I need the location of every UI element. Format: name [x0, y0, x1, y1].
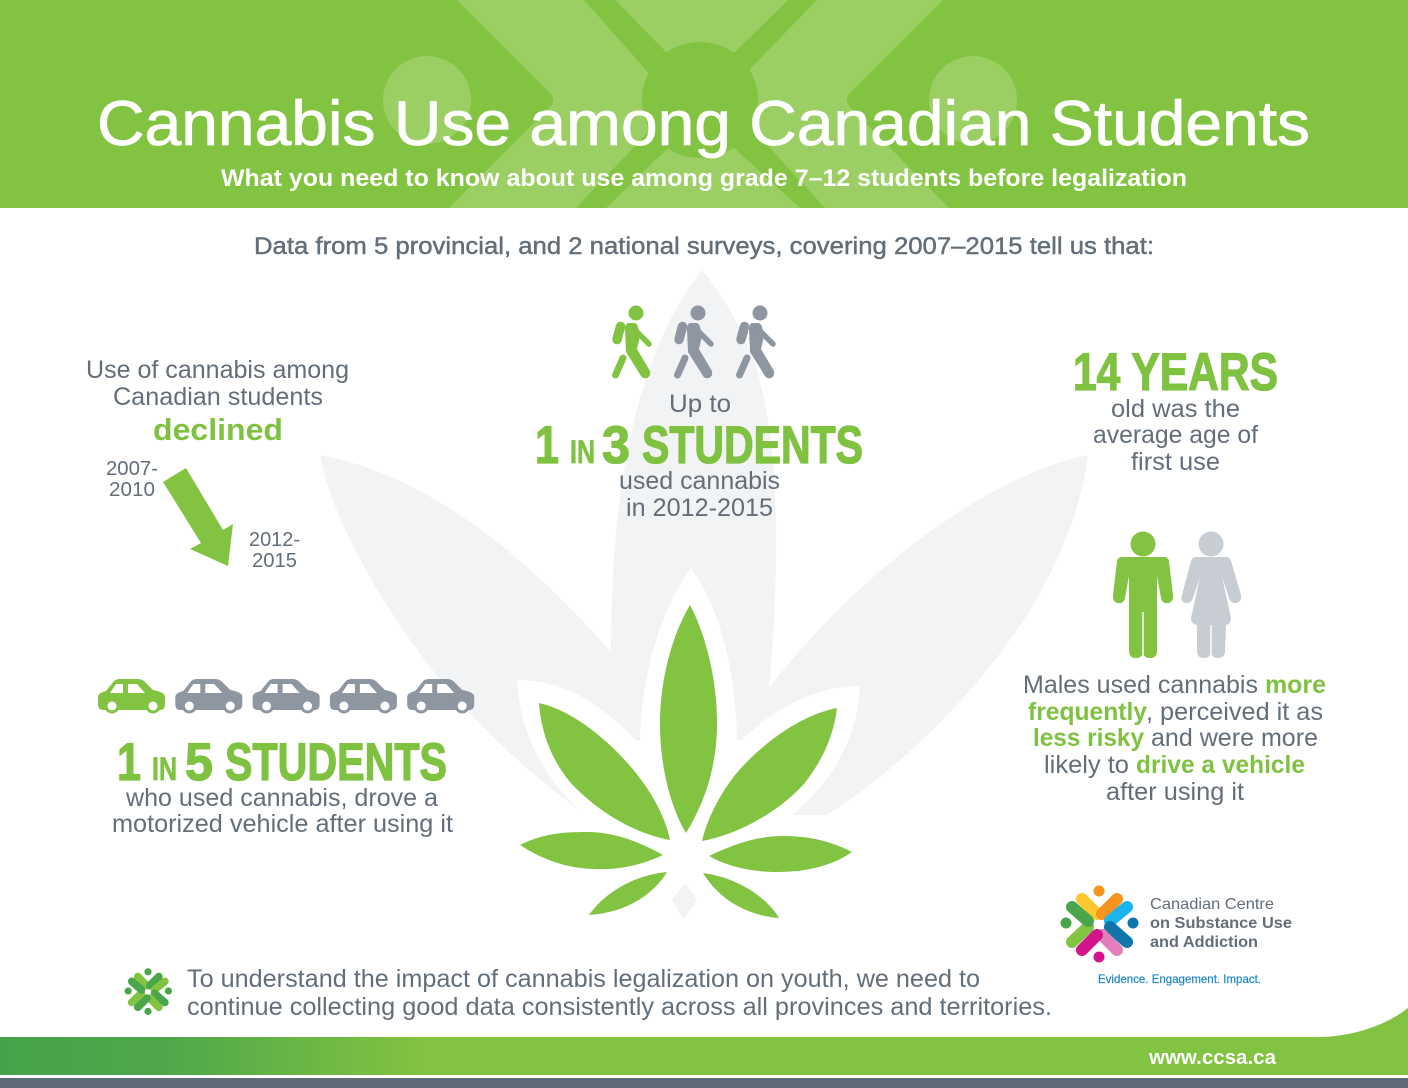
text: male findings: after using it [1106, 778, 1244, 806]
stat: 1 in 5 students: STUDENTS [225, 733, 447, 792]
text: age description [1093, 395, 1258, 476]
stat: 1 in 3 students: 1 [535, 416, 559, 475]
footer band [0, 1008, 1408, 1088]
icon: green car [98, 679, 165, 714]
icon: grey car [253, 679, 320, 714]
stat: 1 in 5 students: IN [152, 751, 177, 787]
panel: age of first use [1073, 343, 1278, 476]
stat: 1 in 5 students: 5 [185, 733, 213, 792]
background grey cannabis leaf [320, 270, 1088, 830]
stat: 1 in 3 students: STUDENTS [642, 416, 863, 475]
icon: male figure [1113, 532, 1173, 658]
footer url: www.ccsa.ca [1148, 1047, 1277, 1069]
icon: grey car [175, 679, 242, 714]
stat: 1 in 3 students: IN [570, 434, 595, 470]
text: drove after use: motorized vehicle after using it [112, 810, 453, 838]
icon: grey car [330, 679, 397, 714]
stat: 14 years: 14 YEARS [1073, 343, 1278, 402]
text: male findings: frequently [1028, 698, 1147, 726]
subtitle: What you need to know about use among grade 7–12 students before legalization [221, 165, 1187, 192]
logo wordmark: on Substance Use [1150, 915, 1292, 932]
text: age description: average age of [1093, 421, 1258, 449]
label: 2012-2015 [249, 529, 300, 572]
panel: 1 in 3 students [535, 306, 863, 522]
title: Cannabis Use among Canadian Students [97, 89, 1310, 159]
arrow: downward trend [163, 468, 233, 566]
icon: walking students [616, 306, 774, 378]
label: 2012-2015: 2015 [252, 550, 297, 572]
icon: grey walker [678, 306, 712, 378]
text: male findings: drive a vehicle [1136, 751, 1305, 779]
text: used cannabis in 2012-2015 [619, 467, 780, 522]
label: 2007-2010: 2007- [106, 458, 158, 480]
icon: green walker [616, 306, 650, 378]
decline text: Canadian students [113, 383, 323, 411]
text: male findings: Males used cannabis [1023, 671, 1258, 699]
label: 2007-2010 [106, 458, 158, 501]
closing statement: continue collecting good data consistently across all provinces and territories. [187, 993, 1052, 1021]
stat: 1 in 5 students: 1 [117, 733, 141, 792]
text: age description: first use [1131, 448, 1220, 476]
text: age description: old was the [1111, 395, 1240, 423]
text: used cannabis in 2012-2015: used cannabis [619, 467, 780, 495]
panel: declining use [86, 356, 349, 572]
icon: grey walker [740, 306, 774, 378]
panel: driving [98, 679, 474, 838]
icon: female figure [1181, 532, 1241, 658]
label: 2012-2015: 2012- [249, 529, 300, 551]
panel: males vs females [1023, 532, 1326, 806]
text: up to: Up to [669, 390, 731, 418]
decline text [86, 356, 349, 447]
text: used cannabis in 2012-2015: in 2012-2015 [626, 494, 773, 522]
white halo around leaf [510, 568, 860, 930]
CCSA logo [1060, 886, 1292, 986]
closing statement [187, 965, 1052, 1021]
green cannabis leaf [520, 605, 852, 918]
text: male findings [1023, 671, 1326, 806]
text: male findings: more [1265, 671, 1326, 699]
header watermark logo [383, 0, 1017, 208]
icon: grey car [407, 679, 474, 714]
text: male findings: likely to [1044, 751, 1129, 779]
stat: 1 in 3 students [535, 416, 863, 475]
stat: 1 in 5 students [117, 733, 447, 792]
text: male findings: , perceived it as [1146, 698, 1323, 726]
header banner [0, 0, 1408, 208]
icon: small CCSA mark [125, 968, 172, 1015]
text: male findings: and were more [1151, 724, 1318, 752]
text: drove after use [112, 784, 453, 838]
text: drove after use: who used cannabis, drove a [125, 784, 438, 812]
decline text: Use of cannabis among [86, 356, 349, 384]
closing statement: To understand the impact of cannabis legalization on youth, we need to [187, 965, 980, 993]
logo wordmark: and Addiction [1150, 934, 1258, 951]
logo tagline: Evidence. Engagement. Impact. [1098, 972, 1261, 986]
logo wordmark [1150, 896, 1292, 951]
intro sentence: Data from 5 provincial, and 2 national surveys, covering 2007–2015 tell us that: [254, 233, 1154, 260]
icon: CCSA colour mark [1060, 886, 1138, 962]
text: male findings: less risky [1033, 724, 1144, 752]
decline text: declined [153, 412, 283, 447]
stat: 1 in 3 students: 3 [602, 416, 630, 475]
logo wordmark: Canadian Centre [1150, 896, 1274, 913]
label: 2007-2010: 2010 [109, 479, 155, 501]
leaf stem diamond [672, 883, 697, 920]
